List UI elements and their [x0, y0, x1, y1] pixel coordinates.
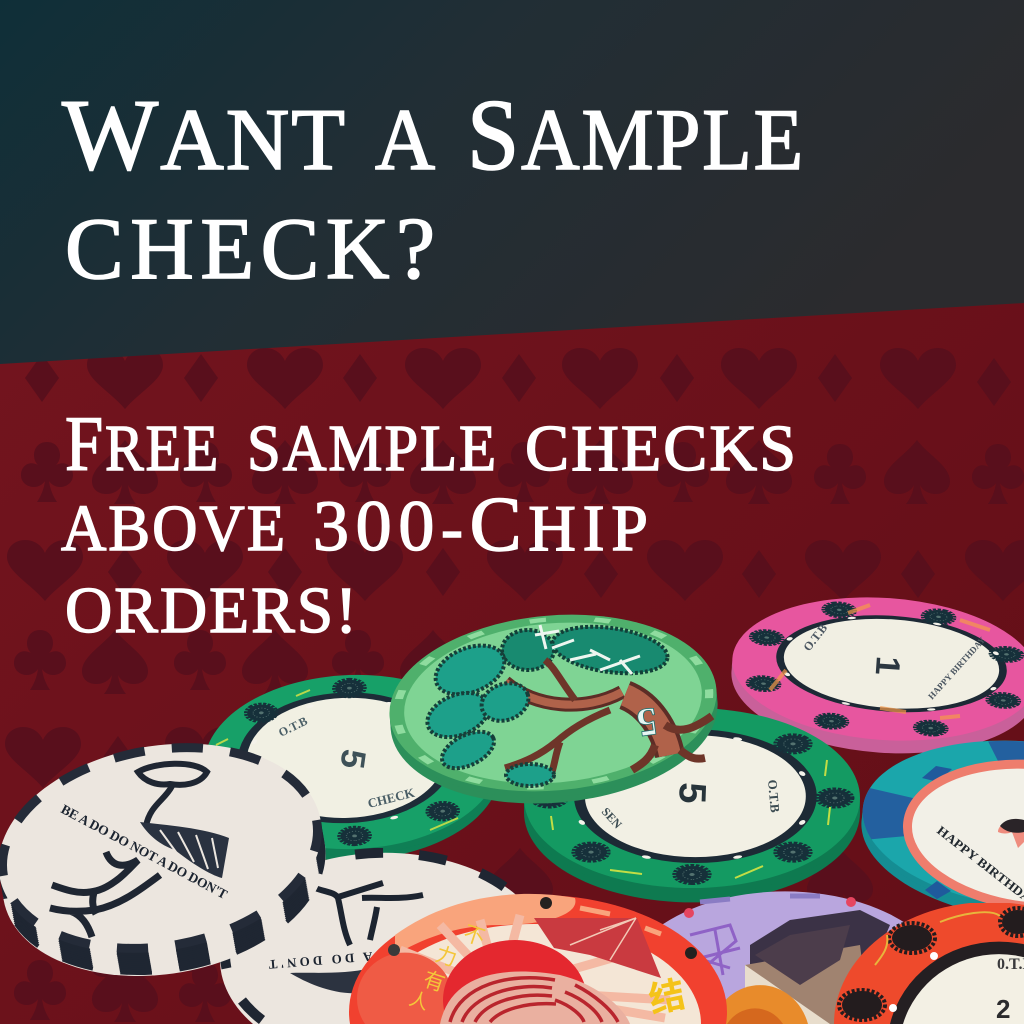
chip: red lantern ronin: 有: [420, 963, 449, 998]
chip: pink O.T.B 1: [731, 597, 1024, 754]
chip: red lantern ronin: 力: [432, 938, 461, 973]
lantern: [357, 953, 453, 1024]
chip: green O.T.B 5 left: CHECK: [366, 785, 417, 811]
chip: green O.T.B 5 right: [524, 708, 860, 902]
artwork: skeleton bird: [50, 764, 229, 937]
chip: white black-striped back: A DO DON'T: [268, 949, 373, 972]
hat: [534, 918, 661, 978]
subheading: sample check offer: CHECKS: [525, 412, 798, 485]
chip: teal happy birthday: [861, 740, 1024, 911]
subheading: sample check offer: FREE: [65, 400, 220, 487]
title: A: [375, 92, 437, 189]
chip: red lantern ronin: 结: [643, 965, 690, 1024]
chip: white black-striped back: [220, 848, 516, 1024]
chip: green O.T.B 5 left: [201, 670, 503, 865]
kanji: 不: [460, 917, 489, 952]
chip: red lantern ronin: 人: [406, 984, 433, 1016]
subheading: sample check offer: 300-CHIP: [313, 480, 650, 567]
chip: purple portrait: [662, 891, 904, 1024]
rays: [400, 915, 670, 1018]
header: dark angled panel: [0, 0, 1024, 364]
background pattern: card suits: [2, 348, 1024, 1024]
chip: pink O.T.B 1: HAPPY BIRTHDAY: [926, 635, 988, 701]
chip: red lantern ronin: [349, 894, 727, 1024]
title: WANT: [62, 79, 347, 192]
chip: white black-striped front: [0, 719, 342, 1000]
chip: orange O.T.B: 2: [996, 994, 1010, 1024]
chip: green bonsai tree: [382, 602, 725, 817]
title: CHECK?: [65, 201, 437, 298]
title: [62, 79, 805, 298]
chip: green O.T.B 5 right: 5: [670, 782, 713, 804]
hair: [440, 972, 630, 1024]
chip: green O.T.B 5 left: O.T.B: [276, 714, 310, 740]
sun: [443, 940, 587, 1024]
subheading: sample check offer: SAMPLE: [247, 412, 498, 485]
tree illustration: 5: [634, 699, 660, 746]
tree illustration: [421, 620, 712, 786]
subheading: sample check offer: ABOVE: [61, 492, 287, 565]
chip motto text: BE A DO DO NOT A DO DON'T: [59, 801, 230, 902]
subheading: sample check offer: ORDERS!: [65, 574, 359, 647]
chip: orange O.T.B: [834, 903, 1024, 1024]
subheading: sample check offer: [61, 400, 798, 647]
chip: pink O.T.B 1: 1: [868, 655, 907, 677]
chip: green O.T.B 5 left: 5: [332, 747, 373, 771]
chip: green O.T.B 5 right: O.T.B: [765, 779, 783, 813]
chip: green O.T.B 5 right: SEN: [599, 805, 625, 832]
title: SAMPLE: [467, 79, 805, 192]
chip: pink O.T.B 1: O.T.B: [800, 621, 830, 654]
